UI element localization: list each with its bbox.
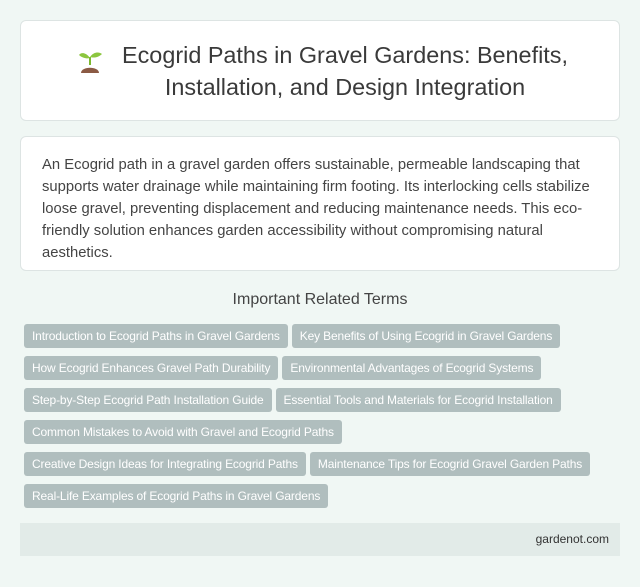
title card: [20, 20, 620, 121]
heading: Ecogrid Paths in Gravel Gardens: Benefits, Installation, and Design Integration: [122, 42, 568, 100]
tags: Maintenance Tips for Ecogrid Gravel Garden Paths: [318, 457, 582, 471]
footer: [20, 523, 620, 556]
footer: gardenot.com: [536, 532, 609, 546]
tags: Key Benefits of Using Ecogrid in Gravel Gardens: [300, 329, 552, 343]
tags: [24, 324, 590, 508]
icon: sprout: [79, 52, 102, 73]
tags: Essential Tools and Materials for Ecogrid Installation: [284, 393, 553, 407]
tags: Step-by-Step Ecogrid Path Installation Guide: [32, 393, 264, 407]
tags: Introduction to Ecogrid Paths in Gravel Gardens: [32, 329, 280, 343]
tags: Creative Design Ideas for Integrating Ecogrid Paths: [32, 457, 298, 471]
tags: Real-Life Examples of Ecogrid Paths in Gravel Gardens: [32, 489, 320, 503]
description panel: An Ecogrid path in a gravel garden offers sustainable, permeable landscaping that supports water drainage while maintaining firm footing. Its interlocking cells stabilize loose gravel, preventing displacement and reducing maintenance needs. This eco-friendly solution enhances garden accessibility without compromising natural aesthetics.: [42, 157, 590, 261]
tags: How Ecogrid Enhances Gravel Path Durability: [32, 361, 270, 375]
tags: Environmental Advantages of Ecogrid Systems: [290, 361, 533, 375]
tags: Common Mistakes to Avoid with Gravel and Ecogrid Paths: [32, 425, 334, 439]
section heading: Important Related Terms: [233, 291, 407, 308]
